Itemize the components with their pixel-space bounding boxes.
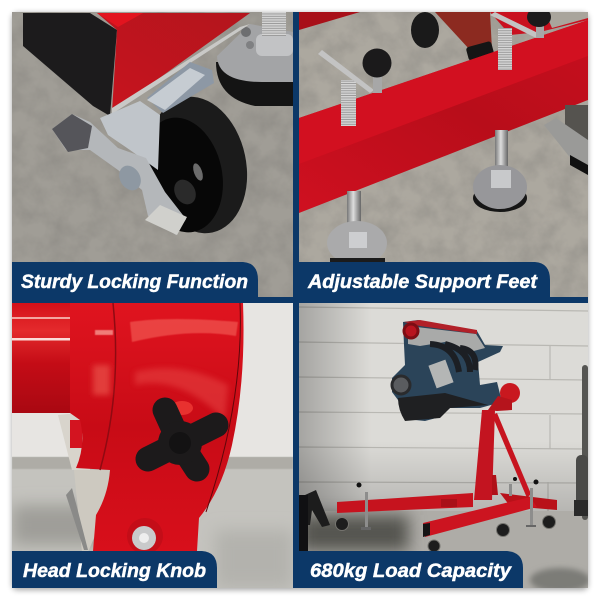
label: sturdy locking function: Sturdy Locking Function	[21, 272, 248, 293]
black end cap	[23, 13, 117, 116]
head swivel mount	[488, 383, 520, 411]
right caster	[544, 105, 588, 175]
silver plate behind head	[58, 412, 112, 552]
label: sturdy locking function	[12, 262, 258, 297]
red crossbeam	[299, 20, 588, 213]
workshop floor	[299, 511, 590, 592]
background jack and tyres	[299, 365, 588, 551]
workshop background	[12, 303, 293, 588]
upper support foot	[473, 130, 527, 212]
panel: head locking knob	[12, 303, 293, 588]
support foot behind caster	[216, 12, 293, 106]
red head housing	[70, 303, 244, 551]
lower support foot	[327, 191, 387, 265]
label: head locking knob	[12, 551, 217, 588]
panel: sturdy locking function	[12, 12, 293, 297]
brake lever and lock pedal	[52, 114, 187, 235]
red engine stand	[337, 410, 557, 537]
label: head locking knob: Head Locking Knob	[23, 561, 206, 582]
panel: 680kg load capacity	[299, 303, 590, 592]
red frame block	[97, 13, 250, 114]
label: adjustable support feet: Adjustable Support Feet	[307, 272, 538, 293]
engine block	[392, 320, 503, 421]
support feet with knobs	[356, 477, 538, 530]
four-arm black knob	[148, 401, 216, 469]
left T-handle screw	[318, 48, 392, 126]
background frame and caster	[299, 12, 588, 61]
casters	[336, 516, 556, 552]
panel: adjustable support feet	[299, 7, 588, 297]
block wall	[299, 303, 588, 515]
label: 680kg load capacity: 680kg Load Capacity	[310, 561, 513, 582]
label: 680kg load capacity	[299, 551, 523, 588]
right T-handle screw	[490, 7, 551, 70]
paint highlights	[93, 319, 238, 420]
bolt	[127, 518, 163, 554]
caster bracket	[100, 62, 214, 170]
label: adjustable support feet	[299, 262, 550, 297]
red cylinder tube	[12, 303, 82, 448]
wheel	[149, 96, 248, 234]
concrete floor	[299, 12, 588, 297]
concrete floor	[12, 12, 293, 297]
